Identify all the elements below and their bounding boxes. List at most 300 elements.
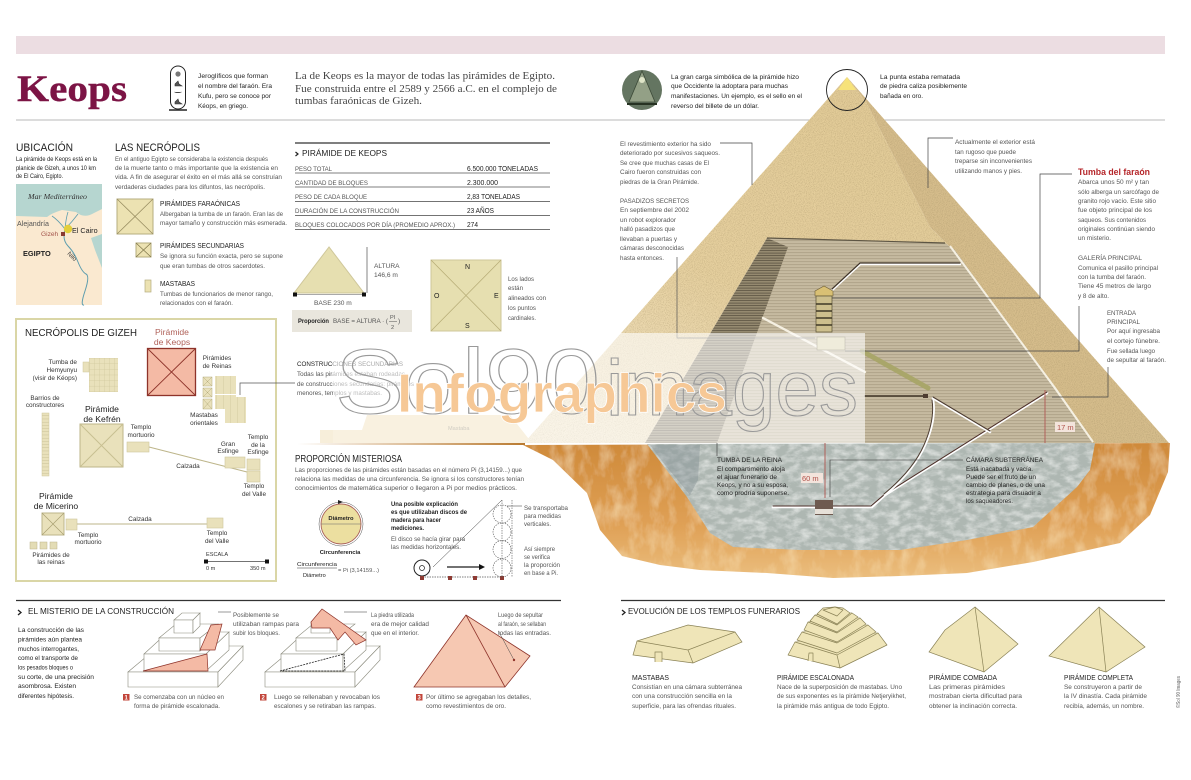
- diagram: cardinal orientation square: O: [434, 293, 440, 300]
- caption: mastabas: Consistían en una cámara subterránea: [632, 684, 742, 691]
- step 3 caption: [416, 694, 531, 710]
- proportion formula: BASE = ALTURA · (: [333, 318, 389, 325]
- air shaft leaders: [832, 174, 1072, 298]
- lit pyramid face: [524, 77, 953, 443]
- diagram: pyramid height and base: [293, 247, 400, 307]
- heading: el misterio: EL MISTERIO DE LA CONSTRUCCIÓN: [28, 606, 174, 616]
- map of Egypt: [16, 184, 102, 305]
- legend: pirámides faraónicas: Albergaban la tumba de un faraón. Eran las de: [160, 211, 283, 218]
- note: galería principal: GALERÍA PRINCIPAL: [1078, 253, 1142, 262]
- note: pasadizos secretos: En septiembre del 2002: [620, 207, 689, 214]
- step 2 caption: escalones y se retiraban las rampas.: [274, 703, 376, 710]
- note: construcciones secundarias: menores, templos y mastabas.: [297, 390, 382, 397]
- background mastaba scene: Mastaba: [448, 426, 470, 432]
- note: galería principal: y 8 de alto.: [1078, 293, 1109, 300]
- panel: necrópolis de Gizeh map: [16, 319, 276, 581]
- note: tumba del faraón: sólo alberga un sarcófago de: [1078, 189, 1159, 196]
- intro text: La de Keops es la mayor de todas las pirámides de Egipto.: [295, 70, 555, 82]
- disc rolling diagram: [414, 500, 522, 580]
- step 3 caption: como revestimientos de oro.: [426, 703, 506, 710]
- note: actualmente: treparse sin inconvenientes: [955, 158, 1033, 165]
- seal note: manifestaciones. Un ejemplo, es el sello en el: [671, 93, 803, 100]
- calzada de Micerino: [77, 516, 229, 545]
- legend: mastabas: Tumbas de funcionarios de menor rango,: [160, 291, 273, 298]
- pirámide de Micerino: [34, 491, 102, 546]
- note: tumba de la reina: [717, 443, 789, 497]
- note: tumba del faraón: Abarca unos 50 m² y tan: [1078, 179, 1149, 186]
- pirámide de Micerino: Pirámide: [39, 491, 73, 501]
- note: tumba de la reina: el ajuar funerario de: [717, 474, 777, 481]
- ramps note: utilizaban rampas para: [233, 621, 299, 628]
- note: entrada principal: el cortejo fúnebre.: [1107, 338, 1160, 345]
- mystery intro text: diferentes hipótesis.: [18, 693, 74, 700]
- pirámides de reinas: [203, 355, 231, 409]
- note: galería principal: Tiene 45 metros de largo: [1078, 283, 1151, 290]
- mastabas orientales: Mastabas: [190, 412, 218, 419]
- diagram: cardinal orientation square: S: [465, 323, 470, 330]
- measure: 17 m: [1045, 390, 1075, 443]
- icon: dollar bill seal: [622, 70, 662, 110]
- icon: cartouche with hieroglyphs: [169, 66, 187, 110]
- pirámides de reinas: Pirámides: [203, 355, 231, 362]
- mystery intro text: [18, 627, 94, 700]
- note: cámara subterránea: [830, 455, 1045, 505]
- location text: de El Cairo, Egipto.: [16, 174, 63, 180]
- legend: pirámides faraónicas: mayor tamaño y construcción más esmerada.: [160, 220, 287, 227]
- intro text: [295, 70, 557, 107]
- caption: pirámide combada: Las primeras pirámides: [929, 684, 1006, 691]
- caption: pirámide escalonada: de sus exponentes es la pirámide Netjeryikhet,: [777, 693, 906, 700]
- caption: pirámide combada: mostraban cierta dificultad para: [929, 693, 1022, 700]
- diagram: cardinal orientation square: cardinales.: [508, 315, 536, 322]
- hieroglyph note: el nombre del faraón. Era: [198, 83, 272, 90]
- calzada de Kefrén: Calzada: [176, 463, 200, 470]
- intro text: tumbas faraónicas de Gizeh.: [295, 95, 422, 107]
- ramps note: Posiblemente se: [233, 612, 279, 619]
- caption: mastabas: MASTABAS: [632, 675, 669, 682]
- note: pasadizos secretos: un robot explorador: [620, 217, 677, 224]
- subterranean chamber: [815, 500, 833, 515]
- legend: pirámides secundarias: [136, 241, 283, 270]
- legend: pirámides secundarias: que eran tumbas de otros sacerdotes.: [160, 263, 265, 270]
- panel: tabla pirámide de Keops: PIRÁMIDE DE KEOPS: [302, 149, 387, 158]
- scale bar: [204, 552, 269, 572]
- heading: ubicación: UBICACIÓN: [16, 141, 73, 154]
- complete pyramid drawing: [1049, 607, 1145, 672]
- disc explanation: mediciones.: [391, 526, 424, 532]
- step 3 caption: Por último se agregaban los detalles,: [426, 694, 531, 701]
- caption: pirámide combada: [929, 673, 1022, 710]
- legend: mastabas: [145, 280, 273, 307]
- note: revestimiento: deteriorado por sucesivos saqueos.: [620, 150, 720, 157]
- proportion formula: PI: [390, 315, 396, 321]
- panel: tabla pirámide de Keops: 23 AÑOS: [467, 206, 494, 215]
- measure: 17 m: 17 m: [1057, 423, 1074, 432]
- interior back wall: [717, 238, 1093, 443]
- templo mortuorio de Kefrén: [127, 424, 155, 452]
- disc explanation: [391, 502, 468, 551]
- mystery intro text: su corte, de una precisión: [18, 674, 94, 681]
- barrios de constructores: [26, 395, 64, 476]
- proportion text: Las proporciones de las pirámides están basadas en el número Pi (3,14159...) que: [295, 467, 522, 474]
- panel: tabla pirámide de Keops: CANTIDAD DE BLOQUES: [295, 180, 369, 187]
- diagram: cardinal orientation square: [431, 260, 546, 331]
- stone note: era de mejor calidad: [371, 621, 429, 628]
- note: pasadizos secretos: llevaban a puertas y: [620, 236, 678, 243]
- note: tumba de la reina: El compartimento aloja: [717, 466, 785, 473]
- calzada de Micerino: Templo: [207, 530, 228, 537]
- pirámide de Kefrén: [80, 404, 123, 467]
- note: entrada principal: [1052, 310, 1166, 397]
- note: pasadizos secretos: [620, 198, 815, 338]
- scale bar: 0 m: [206, 566, 216, 572]
- location text: planicie de Gizeh, a unos 10 km: [16, 166, 96, 172]
- note: tumba del faraón: originales continúan siendo: [1078, 226, 1155, 233]
- tumba de Hemyunyu: Tumba de: [48, 359, 77, 366]
- legend: pirámides faraónicas: PIRÁMIDES FARAÓNICAS: [160, 199, 240, 208]
- map of Egypt: Gizeh: [41, 231, 59, 238]
- panel: tabla pirámide de Keops: PESO TOTAL: [295, 166, 332, 173]
- proportion text: conocimientos de matemática superior o llegaron a Pi por medios prácticos.: [295, 485, 517, 492]
- pyramidion note: bañada en oro.: [880, 93, 923, 100]
- interior dark wedge: [645, 238, 788, 443]
- stone note: La piedra utilizada: [371, 612, 414, 619]
- caption: pirámide escalonada: [777, 673, 906, 710]
- diagram: pyramid height and base: 146,6 m: [374, 272, 398, 279]
- note: entrada principal: Fue sellada luego: [1107, 348, 1155, 355]
- stone note: que en el interior.: [371, 630, 419, 637]
- note: tumba del faraón: granito rojo vacío. Este sitio: [1078, 198, 1156, 205]
- location text: La pirámide de Keops está en la: [16, 157, 98, 163]
- tumba de Hemyunyu: [33, 358, 118, 392]
- note: tumba del faraón: [1078, 167, 1159, 242]
- caption: pirámide completa: [1064, 673, 1147, 710]
- note: entrada principal: ENTRADA: [1107, 310, 1137, 317]
- panel: evolución de los templos funerarios: [621, 600, 1165, 710]
- stone note: [371, 612, 429, 637]
- templo mortuorio de Kefrén: Templo: [131, 424, 152, 431]
- proportion formula: [292, 310, 412, 332]
- mastabas orientales: orientales: [190, 420, 218, 427]
- copyright: ©Sol 90 Images: [1175, 676, 1182, 708]
- caption: pirámide combada: obtener la inclinación correcta.: [929, 703, 1017, 710]
- caption: pirámide completa: PIRÁMIDE COMPLETA: [1064, 673, 1133, 682]
- note: construcciones secundarias: de construcciones secundarias: pirámides: [297, 381, 415, 388]
- circle diagram: Diámetro: [328, 516, 354, 522]
- panel: tabla pirámide de Keops: 2,83 TONELADAS: [467, 194, 520, 201]
- proportion formula: ): [398, 318, 400, 325]
- disc explanation: El disco se hacía girar para: [391, 536, 465, 543]
- king's chamber: [815, 286, 845, 350]
- gran esfinge: [217, 441, 245, 468]
- caption: mastabas: superficie, para las ofrendas rituales.: [632, 703, 736, 710]
- necrópolis intro: En el antiguo Egipto se consideraba la existencia después: [115, 156, 269, 163]
- vertical measures text: [524, 505, 568, 577]
- note: cámara subterránea: Está inacabada y vacía.: [966, 466, 1033, 473]
- queen's chamber: [923, 394, 928, 398]
- map of Egypt: Nilo: [66, 251, 78, 263]
- note: tumba de la reina: TUMBA DE LA REINA: [717, 457, 783, 464]
- barrios de constructores: constructores: [26, 402, 64, 409]
- calzada de Kefrén: [149, 447, 247, 472]
- pirámide de Keops: de Keops: [154, 337, 190, 347]
- note: tumba de la reina: Keops, y no a su esposa,: [717, 482, 788, 489]
- diagram: pyramid height and base: ALTURA: [374, 263, 400, 270]
- note: tumba del faraón: un misterio.: [1078, 235, 1111, 242]
- heading: necrópolis de Gizeh: NECRÓPOLIS DE GIZEH: [25, 326, 137, 339]
- step 1 caption: forma de pirámide escalonada.: [134, 703, 220, 710]
- mystery intro text: los pesados bloques o: [18, 664, 73, 672]
- gran esfinge: Gran: [221, 441, 236, 448]
- formula: = Pi (3,14159...): [338, 568, 379, 574]
- sealed entrances note: al faraón, se sellaban: [498, 621, 546, 628]
- note: pasadizos secretos: PASADIZOS SECRETOS: [620, 198, 690, 205]
- mastabas orientales: [190, 376, 246, 427]
- gran esfinge: Esfinge: [217, 448, 239, 455]
- rock bed: [647, 443, 1095, 550]
- bent pyramid drawing: [929, 607, 1018, 672]
- sealed entrances note: [498, 612, 551, 637]
- caption: mastabas: [632, 675, 742, 710]
- diagram: cardinal orientation square: N: [465, 264, 470, 271]
- sealed entrances note: todas las entradas.: [498, 630, 551, 637]
- templo mortuorio de Kefrén: mortuorio: [128, 432, 155, 439]
- note: tumba de la reina: como prodría suponerse.: [717, 490, 789, 497]
- watermark overlay: [333, 331, 865, 443]
- pirámide de Keops: [148, 327, 196, 396]
- map of Egypt: El Cairo: [72, 226, 98, 235]
- hieroglyph note: [198, 73, 272, 110]
- location text: [16, 157, 98, 180]
- pirámide de Kefrén: de Kefrén: [83, 414, 121, 424]
- pirámide de Kefrén: Pirámide: [85, 404, 119, 414]
- header rule: [16, 119, 1165, 121]
- note: galería principal: Comunica el pasillo principal: [1078, 265, 1159, 272]
- note: cámara subterránea: estrategia para disuadir a: [966, 490, 1041, 497]
- intro text: Fue construida entre el 2589 y 2566 a.C. en el complejo de: [295, 83, 557, 95]
- templo de la esfinge y del valle: del Valle: [242, 491, 266, 498]
- note: galería principal: [845, 253, 1159, 351]
- hieroglyph note: Jeroglíficos que forman: [198, 73, 268, 80]
- dark rock at left edge: [650, 445, 700, 495]
- mystery intro text: muchos interrogantes,: [18, 646, 79, 653]
- hieroglyph note: Kufu, pero se conoce por: [198, 93, 272, 100]
- legend: pirámides secundarias: Se ignora su función exacta, pero se supone: [160, 253, 283, 260]
- note: entrada principal: Por aquí ingresaba: [1107, 328, 1160, 335]
- note: construcciones secundarias: Todas las pirámides estaban rodeadas: [297, 371, 406, 378]
- step 2 caption: Luego se rellenaban y revocaban los: [274, 694, 381, 701]
- map of Egypt: Mar Mediterráneo: [27, 192, 87, 201]
- pirámides de las reinas: las reinas: [37, 559, 65, 566]
- step 3 diagram: [414, 615, 530, 687]
- caption: pirámide completa: la IV dinastía. Cada pirámide: [1064, 693, 1147, 700]
- step 2 caption: 2: [262, 696, 266, 702]
- note: cámara subterránea: los saqueadores.: [966, 498, 1013, 505]
- pink top band: [16, 36, 1165, 54]
- note: revestimiento: Cairo fueron construidas con: [620, 169, 701, 176]
- mystery intro text: La construcción de las: [18, 627, 85, 634]
- note: actualmente: [928, 138, 1035, 188]
- necrópolis intro: verdaderas ciudades para los difuntos, las necrópolis.: [115, 184, 265, 191]
- measure: 60 m: 60 m: [802, 474, 819, 483]
- stepped pyramid drawing: [788, 607, 887, 668]
- legend: pirámides faraónicas: [117, 199, 287, 234]
- legend: mastabas: MASTABAS: [160, 281, 195, 288]
- ramps note: subir los bloques.: [233, 630, 280, 637]
- pirámide de Micerino: Templo: [78, 532, 99, 539]
- caption: pirámide escalonada: PIRÁMIDE ESCALONADA: [777, 673, 854, 682]
- step 1 caption: 1: [124, 696, 128, 702]
- templo de la esfinge y del valle: Templo: [248, 434, 269, 441]
- seal note: que Occidente la adoptara para muchas: [671, 83, 789, 90]
- proportion text: relaciona las medidas de una circunferencia. Se ignora si los constructores tenían: [295, 476, 524, 483]
- seal note: [671, 74, 803, 110]
- note: cámara subterránea: cambio de planes, o de una: [966, 482, 1045, 489]
- templo de la esfinge y del valle: de la: [251, 442, 265, 449]
- note: entrada principal: PRINCIPAL: [1107, 319, 1140, 326]
- step 2 caption: [260, 694, 381, 710]
- pirámides de reinas: de Reinas: [203, 363, 231, 370]
- hieroglyph note: Kéops, en griego.: [198, 103, 248, 110]
- vertical measures text: Así siempre: [524, 546, 555, 553]
- proportion formula: 2: [391, 325, 394, 331]
- note: revestimiento: Se cree que muchas casas de El: [620, 160, 709, 167]
- step 1 diagram: [128, 612, 243, 687]
- vertical measures text: para medidas: [524, 513, 562, 520]
- note: tumba del faraón: Tumba del faraón: [1078, 167, 1150, 177]
- step 1 caption: Se comenzaba con un núcleo en: [134, 694, 224, 701]
- diagram: cardinal orientation square: están: [508, 285, 523, 292]
- vertical measures text: se verifica: [524, 554, 550, 561]
- note: actualmente: Actualmente el exterior está: [955, 139, 1035, 146]
- necrópolis intro: [115, 156, 282, 191]
- caption: pirámide escalonada: la pirámide más antigua de todo Egipto.: [777, 703, 889, 710]
- measure: 60 m: [801, 443, 825, 498]
- panel: tabla pirámide de Keops: BLOQUES COLOCADOS POR DÍA (PROMEDIO APROX.): [295, 220, 455, 229]
- vertical measures text: verticales.: [524, 521, 551, 528]
- disc explanation: Una posible explicación: [391, 502, 458, 508]
- watermark overlay: Sol90: [335, 331, 600, 433]
- shaded casing face: [847, 77, 1169, 443]
- caption: pirámide escalonada: Nace de la superposición de mastabas. Uno: [777, 684, 902, 691]
- pyramidion note: [880, 74, 967, 100]
- necrópolis intro: de la muerte tanto o más importante que la existencia en: [115, 165, 278, 172]
- note: revestimiento: El revestimiento exterior ha sido: [620, 141, 711, 148]
- vertical measures text: en base a Pi.: [524, 570, 558, 577]
- step 1 caption: [123, 694, 224, 710]
- pyramidion note: La punta estaba rematada: [880, 74, 960, 81]
- step 2 diagram: [265, 609, 380, 687]
- casing edge: [950, 246, 1093, 442]
- circle diagram: Circunferencia: [320, 550, 361, 556]
- legend: mastabas: relacionados con el faraón.: [160, 300, 233, 307]
- background mastaba scene: [297, 415, 532, 445]
- vertical measures text: Se transportaba: [524, 505, 568, 512]
- note: cámara subterránea: CÁMARA SUBTERRÁNEA: [966, 455, 1044, 464]
- formula: Diámetro: [303, 573, 326, 579]
- golden pyramidion: [838, 77, 856, 90]
- mystery intro text: como el transporte de: [18, 655, 78, 662]
- soil cross section: [523, 443, 1170, 578]
- panel: tabla pirámide de Keops: DURACIÓN DE LA CONSTRUCCIÓN: [295, 206, 399, 215]
- caption: pirámide completa: recibía, además, un nombre.: [1064, 703, 1144, 710]
- tumba de Hemyunyu: Hemyunyu: [46, 367, 77, 374]
- barrios de constructores: Barrios de: [30, 395, 60, 402]
- watermark overlay: images: [606, 343, 858, 432]
- note: galería principal: con la tumba del faraón.: [1078, 274, 1146, 281]
- templo de la esfinge y del valle: [242, 434, 269, 498]
- pirámide de Keops: Pirámide: [155, 327, 189, 337]
- note: revestimiento: [620, 141, 752, 186]
- panel: tabla pirámide de Keops: [295, 143, 550, 230]
- pirámide de Micerino: mortuorio: [74, 539, 102, 546]
- title: Keops: [17, 69, 127, 110]
- mastaba drawing: [633, 625, 742, 663]
- pyramidion note: de piedra caliza posiblemente: [880, 83, 967, 90]
- proportion formula: Proporción: [298, 319, 329, 325]
- heading: proporción misteriosa: PROPORCIÓN MISTERIOSA: [295, 452, 402, 465]
- sealed entrances note: Luego de sepultar: [498, 612, 544, 619]
- seal note: La gran carga simbólica de la pirámide hizo: [671, 74, 799, 81]
- vertical measures text: la proporción: [524, 562, 560, 569]
- scale bar: ESCALA: [206, 552, 228, 558]
- note: tumba del faraón: fue objeto principal de los: [1078, 207, 1153, 214]
- note: actualmente: tan rugoso que puede: [955, 149, 1016, 156]
- panel: el misterio de la construcción: [16, 600, 561, 710]
- calzada de Micerino: del Valle: [205, 538, 229, 545]
- map of Egypt: Alejandría: [17, 221, 49, 228]
- panel: ubicación: [16, 141, 102, 305]
- note: pasadizos secretos: hasta entonces.: [620, 255, 664, 262]
- note: entrada principal: de sepultar al faraón.: [1107, 357, 1166, 364]
- necrópolis intro: vida. A fin de asegurar el éxito en el más allá se construían: [115, 174, 282, 181]
- caption: mastabas: con una construcción sencilla en la: [632, 693, 732, 700]
- seal note: reverso del billete de un dólar.: [671, 103, 759, 110]
- formula: [297, 562, 379, 579]
- icon: pyramidion highlight circle: [826, 70, 868, 110]
- diagram: cardinal orientation square: los puntos: [508, 305, 537, 312]
- mystery intro text: pirámides aún plantea: [18, 636, 82, 644]
- diagram: cardinal orientation square: alineados con: [508, 295, 546, 302]
- note: cámara subterránea: Puede ser el fruto de un: [966, 474, 1036, 481]
- pirámides de las reinas: [30, 542, 70, 566]
- note: pasadizos secretos: cámaras desconocidas: [620, 245, 685, 252]
- diagram: cardinal orientation square: Los lados: [508, 276, 535, 283]
- note: construcciones secundarias: [297, 361, 415, 397]
- watermark overlay: Infographics: [397, 362, 727, 424]
- leader: construcciones secundarias: [240, 383, 295, 395]
- map of Egypt: EGIPTO: [23, 249, 51, 258]
- proportion text: [295, 467, 524, 492]
- panel: las necrópolis: [115, 141, 287, 307]
- diagram: cardinal orientation square: E: [494, 293, 499, 300]
- note: construcciones secundarias: CONSTRUCCIONES SECUNDARIAS: [297, 361, 404, 368]
- templo de la esfinge y del valle: Templo: [244, 483, 265, 490]
- main pyramid illustration: [523, 77, 1170, 578]
- note: actualmente: utilizando manos y pies.: [955, 168, 1022, 175]
- note: revestimiento: piedras de la Gran Pirámide.: [620, 179, 699, 186]
- tumba de Hemyunyu: (visir de Kéops): [33, 375, 77, 382]
- heading: las necrópolis: LAS NECRÓPOLIS: [115, 141, 200, 154]
- ramps note: [233, 612, 299, 637]
- note: pasadizos secretos: halló pasadizos que: [620, 226, 675, 233]
- passages: [763, 263, 1047, 507]
- disc explanation: es que utilizaban discos de: [391, 510, 468, 516]
- pirámide de Micerino: de Micerino: [34, 501, 78, 511]
- scale bar: 350 m: [250, 566, 266, 572]
- legend: pirámides secundarias: PIRÁMIDES SECUNDARIAS: [160, 241, 244, 250]
- panel: tabla pirámide de Keops: 2.300.000: [467, 180, 498, 187]
